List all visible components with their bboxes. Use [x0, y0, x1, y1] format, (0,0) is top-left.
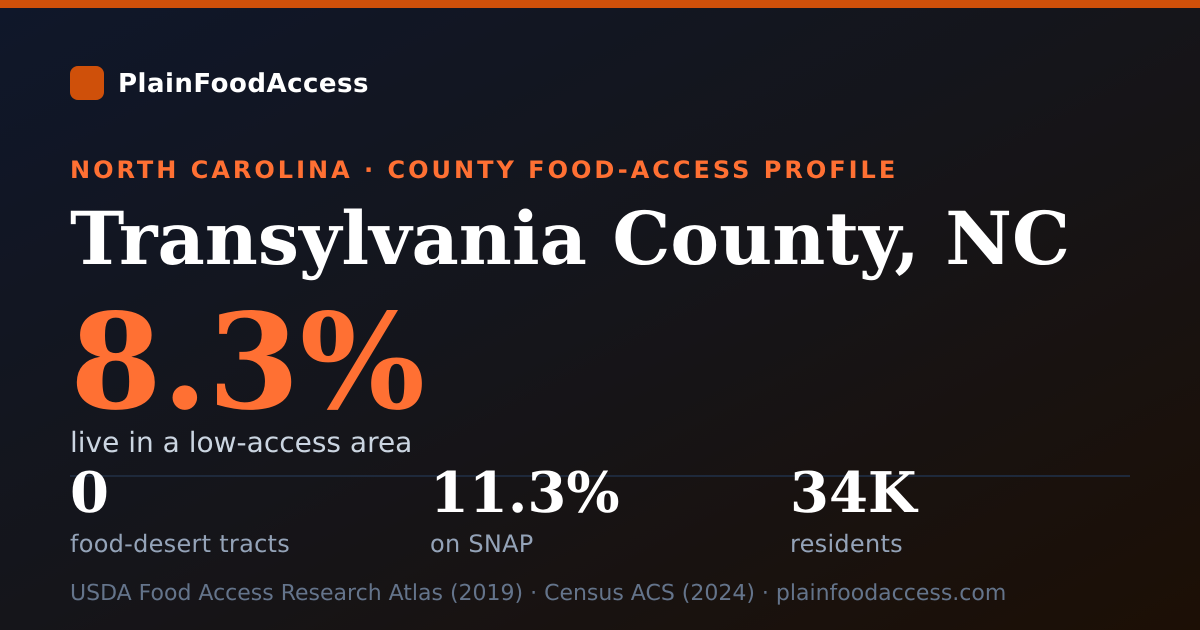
value: 11.3%: [430, 460, 620, 526]
eyebrow: NORTH CAROLINA · COUNTY FOOD-ACCESS PROFILE: [70, 156, 898, 184]
divider: [70, 475, 1130, 477]
source footer: USDA Food Access Research Atlas (2019) · Census ACS (2024) · plainfoodaccess.com: [70, 581, 1006, 606]
stat: food-desert tracts: [70, 460, 290, 558]
big stat: 8.3%: [70, 285, 425, 440]
top accent bar: [0, 0, 1200, 8]
value: 34K: [790, 460, 917, 526]
brand header: [70, 66, 369, 100]
big stat label: live in a low-access area: [70, 426, 412, 459]
label: food-desert tracts: [70, 530, 290, 558]
label: residents: [790, 530, 903, 558]
value: 0: [70, 460, 109, 526]
brand name: PlainFoodAccess: [118, 69, 369, 99]
brand logo icon: [70, 66, 104, 100]
label: on SNAP: [430, 530, 534, 558]
stat: on SNAP: [430, 460, 620, 558]
title: Transylvania County, NC: [70, 196, 1070, 282]
stat: residents: [790, 460, 918, 558]
